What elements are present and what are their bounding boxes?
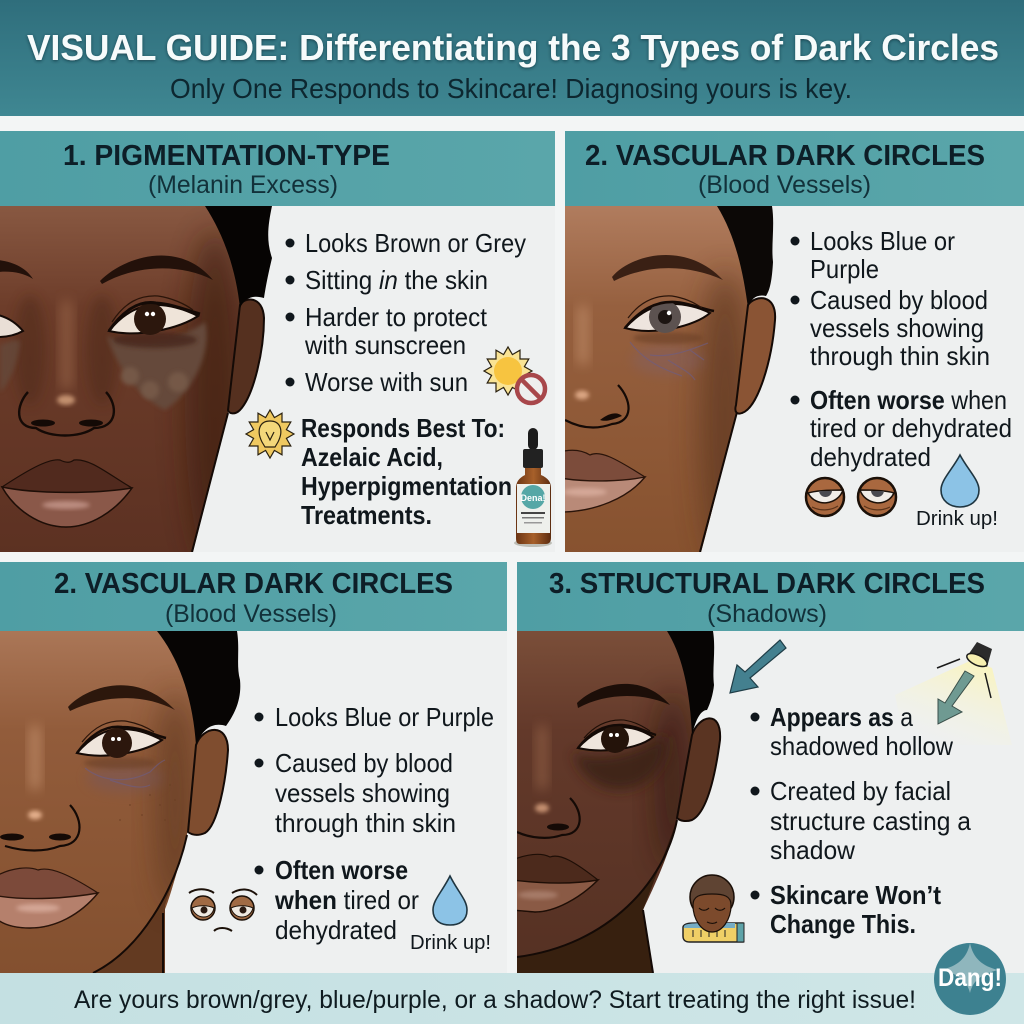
lips	[512, 854, 598, 912]
text: responds best to: Azelaic Acid,	[301, 442, 443, 472]
bullet list: pigmentation: Worse with sun	[305, 367, 468, 397]
illustration: face with blue veins	[560, 200, 775, 570]
text: responds best to: Hyperpigmentation	[301, 471, 512, 501]
illustration: face with pigmentation patches	[0, 200, 272, 570]
hair	[157, 631, 240, 745]
panel header: pigmentation: 1. PIGMENTATION-TYPE	[63, 140, 390, 172]
eye	[77, 721, 166, 758]
eyebrow	[612, 255, 723, 281]
under-eye vascular shadow	[630, 332, 708, 380]
icon: serum bottle	[514, 428, 552, 547]
title banner	[0, 0, 1024, 116]
eyebrows	[100, 256, 213, 284]
bullet list: vascular bottom: Caused by blood	[275, 748, 453, 778]
icon: tired eyes	[806, 478, 896, 516]
bullet list: structural: shadowed hollow	[770, 731, 953, 761]
icon: lightbulb badge	[246, 410, 294, 458]
neck shadow	[517, 820, 677, 975]
panel header: vascular top: (Blood Vessels)	[698, 171, 871, 199]
panel header: pigmentation	[0, 131, 555, 206]
footer band	[0, 973, 1024, 1024]
bullet list: structural: Skincare Won’t	[770, 880, 941, 910]
icon: water drop	[941, 455, 979, 507]
panel header: pigmentation: (Melanin Excess)	[148, 171, 338, 199]
right eye	[109, 296, 200, 335]
label: drink up: Drink up!	[410, 932, 491, 954]
icon: sleepy face	[189, 889, 257, 931]
lips	[560, 450, 645, 512]
nose	[517, 798, 580, 838]
bullet list: pigmentation: Harder to protect	[305, 302, 488, 332]
panel: 2 vascular dark circles (top)	[560, 131, 1024, 570]
eyebrow	[577, 684, 670, 708]
panel header: vascular top: 2. VASCULAR DARK CIRCLES	[585, 140, 985, 172]
bullet list: structural	[750, 702, 972, 939]
panel header: structural: (Shadows)	[707, 600, 827, 628]
icon: water drop	[433, 876, 467, 925]
bullet list: vascular bottom: when tired or	[274, 885, 419, 915]
hair	[667, 631, 714, 735]
under-eye hollow	[573, 735, 666, 790]
nose	[565, 385, 629, 427]
hair	[717, 206, 773, 308]
bullet list: pigmentation	[286, 228, 526, 397]
arrow: shadow direction	[730, 640, 786, 693]
bullet list: vascular top: dehydrated	[810, 442, 931, 472]
icon: serum bottle: Dena!	[520, 493, 546, 503]
panel: 2 vascular dark circles (bottom)	[0, 562, 507, 977]
panel header: vascular bottom	[0, 562, 507, 631]
eyebrow	[68, 685, 175, 711]
bullet list: vascular top: through thin skin	[810, 341, 990, 371]
bullet list: vascular top: tired or dehydrated	[810, 413, 1012, 443]
icon: head on measuring tape	[683, 875, 744, 942]
panel header: vascular bottom: (Blood Vessels)	[165, 600, 337, 628]
bullet list: structural: structure casting a	[770, 806, 972, 836]
bullet list: vascular top: Purple	[810, 254, 879, 284]
logo badge: Dang!	[934, 943, 1006, 1015]
neck shadow	[96, 886, 171, 973]
text: responds best to: Treatments.	[301, 500, 432, 530]
bullet list: vascular bottom: Often worse	[275, 855, 408, 885]
bullet list: structural: shadow	[770, 835, 855, 865]
illustration: face with under-eye shadow	[512, 625, 720, 977]
bullet list: structural: Change This.	[770, 909, 916, 939]
bullet list: pigmentation: Looks Brown or Grey	[305, 228, 526, 258]
bullet list: vascular top	[790, 226, 1012, 472]
bullet list: vascular top: Often worse when	[810, 385, 1007, 415]
bullet list: vascular top: Caused by blood	[810, 285, 988, 315]
bullet list: vascular bottom: Looks Blue or Purple	[275, 702, 494, 732]
title: VISUAL GUIDE: Differentiating the 3 Types of Dark Circles	[27, 27, 999, 68]
bullet list: vascular bottom: dehydrated	[275, 915, 397, 945]
subtitle: Only One Responds to Skincare! Diagnosing yours is key.	[170, 73, 852, 104]
pigmentation patch	[0, 322, 207, 410]
text: responds best to	[301, 413, 512, 530]
panel header: vascular bottom: 2. VASCULAR DARK CIRCLES	[54, 568, 453, 600]
panel: 3 structural dark circles	[512, 562, 1024, 977]
left eye	[0, 315, 23, 337]
logo badge: Dang!: Dang!	[938, 964, 1002, 992]
text: responds best to: Responds Best To:	[301, 413, 505, 443]
panel header: structural: 3. STRUCTURAL DARK CIRCLES	[549, 568, 985, 600]
panel: 1 pigmentation-type	[0, 131, 555, 570]
footer question text: Are yours brown/grey, blue/purple, or a shadow? Start treating the right issue!	[74, 986, 916, 1014]
label: drink up: Drink up!	[916, 508, 998, 530]
under-eye vascular shadow	[84, 757, 165, 792]
ear	[735, 298, 775, 414]
icon: lamp with light beam	[895, 642, 1012, 745]
bullet list: pigmentation: Sitting in the skin	[305, 265, 488, 295]
icon: sun with prohibition sign	[484, 347, 545, 403]
lips	[0, 868, 98, 928]
nose	[19, 392, 114, 436]
illustration: face with veins and freckles	[0, 625, 240, 977]
nose	[5, 805, 79, 850]
bullet list: vascular bottom	[254, 702, 494, 945]
bullet list: vascular bottom: vessels showing	[275, 778, 450, 808]
ear	[677, 718, 720, 821]
ear	[188, 730, 228, 835]
panel header: structural	[517, 562, 1024, 631]
eye	[578, 720, 656, 753]
freckles	[119, 794, 160, 821]
panel header: vascular top	[565, 131, 1024, 206]
bullet list: structural: Appears as a	[770, 702, 913, 732]
bullet list: structural: Created by facial	[770, 776, 951, 806]
bullet list: pigmentation: with sunscreen	[304, 330, 466, 360]
bullet list: vascular bottom: through thin skin	[275, 808, 456, 838]
ear	[228, 299, 264, 413]
eye	[625, 296, 714, 333]
bullet list: vascular top: Looks Blue or	[810, 226, 955, 256]
lips	[2, 460, 132, 527]
bullet list: vascular top: vessels showing	[810, 313, 984, 343]
hair	[205, 206, 272, 308]
